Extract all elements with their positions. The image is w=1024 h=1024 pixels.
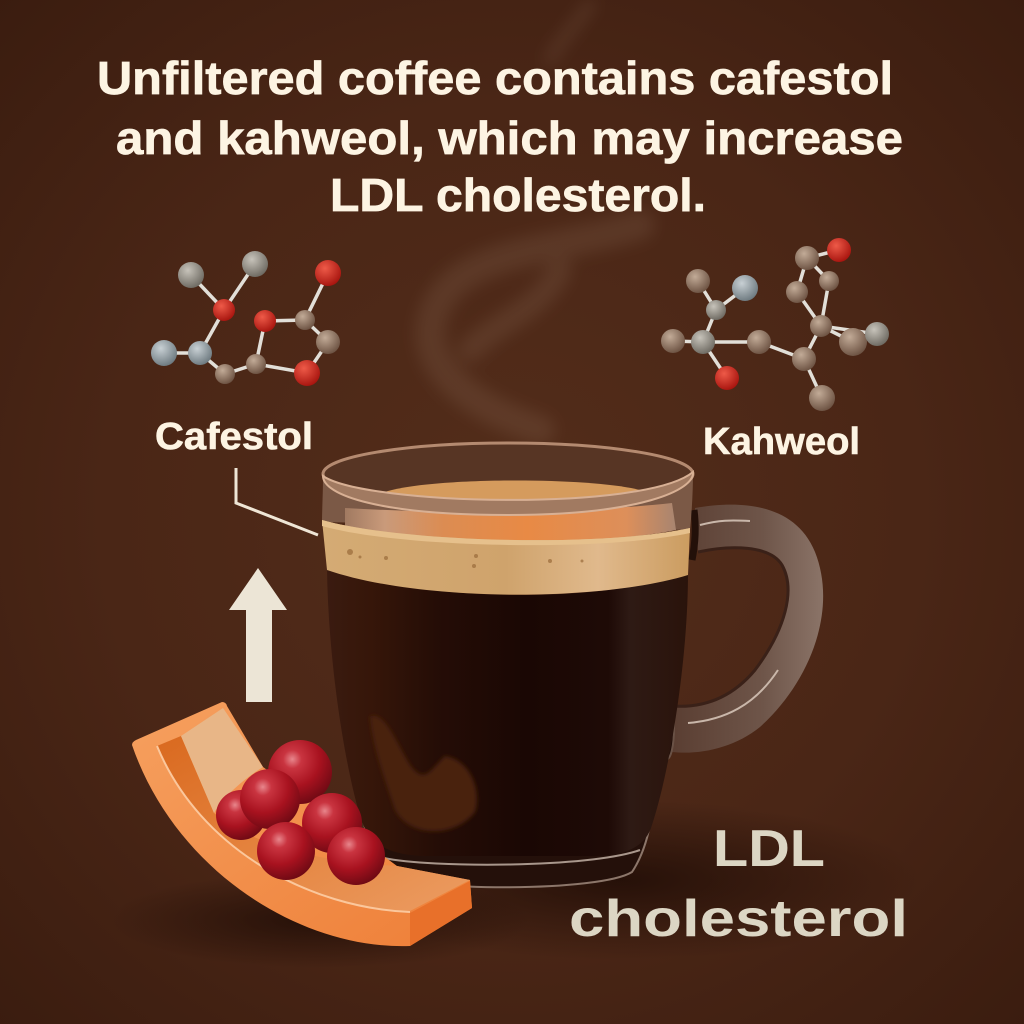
steam <box>430 5 640 430</box>
orange lipid slab <box>132 702 472 946</box>
cup shadow <box>320 800 920 960</box>
slab back wall <box>181 708 263 813</box>
coffee berries <box>216 740 385 885</box>
glass back rim <box>323 443 693 505</box>
label: LDL cholesterol: cholesterol <box>569 890 908 948</box>
label: LDL cholesterol: LDL <box>713 820 825 878</box>
coffee <box>327 568 688 856</box>
foam band <box>322 520 690 595</box>
leader line <box>236 468 318 535</box>
crema surface <box>385 480 640 502</box>
cup handle <box>660 505 823 759</box>
title <box>97 52 903 221</box>
label: Kahweol: Kahweol <box>703 421 860 463</box>
molecule: cafestol <box>151 251 341 386</box>
front rim <box>323 472 693 515</box>
cup base <box>362 815 650 887</box>
arrow: up <box>229 568 287 702</box>
slab floor <box>157 736 470 911</box>
reflection in coffee <box>370 716 477 831</box>
slab shadow <box>110 872 530 968</box>
title: LDL cholesterol. <box>330 169 706 221</box>
title: Unfiltered coffee contains cafestol <box>97 52 893 104</box>
label: LDL cholesterol <box>569 820 908 948</box>
crema seen through glass <box>345 503 676 542</box>
slab front edge <box>410 881 472 946</box>
glass upper body <box>322 472 693 530</box>
title: and kahweol, which may increase <box>116 112 903 164</box>
molecule: kahweol <box>661 238 889 411</box>
coffee cup <box>322 443 823 887</box>
label: Cafestol: Cafestol <box>155 416 313 458</box>
